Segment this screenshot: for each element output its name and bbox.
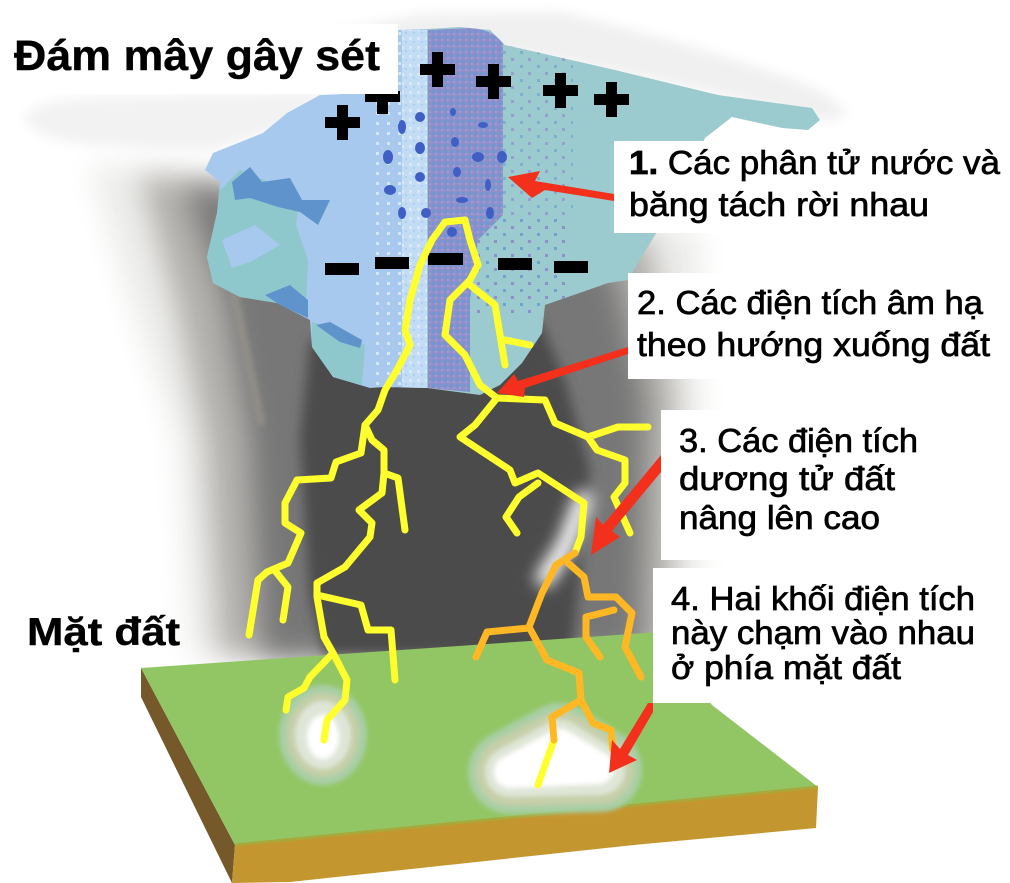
- cloud right half: teal: [427, 27, 820, 395]
- callout 3: 3. Các điện tích: [679, 422, 918, 459]
- callout 2: [628, 273, 1010, 379]
- purple stippled band: [428, 28, 503, 392]
- title box: [0, 24, 398, 94]
- callout 3: dương tử đất: [679, 460, 895, 497]
- callout 3: nâng lên cao: [679, 499, 880, 536]
- callout 1: băng tách rời nhau: [629, 186, 929, 223]
- panel: storm cloud body: [205, 27, 820, 395]
- title: Đám mây gây sét: [14, 32, 380, 80]
- callout 2: theo hướng xuống đất: [637, 326, 990, 363]
- ground left side: [141, 668, 235, 883]
- arrow 4: [609, 703, 653, 773]
- glow: left strike point: [279, 685, 367, 785]
- negative charges: [325, 253, 588, 275]
- panel: dark storm column: [90, 165, 700, 655]
- light stippled band: [402, 30, 427, 388]
- ground label: Mặt đất: [27, 611, 180, 654]
- water and ice particles: [383, 108, 507, 237]
- callout 4: này chạm vào nhau: [671, 614, 975, 651]
- sparse stipple beside the light band: [376, 32, 401, 388]
- arrow 3: [591, 455, 661, 555]
- callout 1: 1. Các phân tử nước và: [629, 144, 1001, 181]
- callout 2: 2. Các điện tích âm hạ: [637, 284, 984, 321]
- lightning: right branches: [445, 220, 648, 785]
- panel: pale upper cloud: [24, 12, 846, 150]
- lightning: left branches: [249, 220, 465, 740]
- panel: ground surface: [141, 632, 818, 883]
- callout 4: ở phía mặt đất: [671, 649, 901, 686]
- glow: right strike point: [510, 745, 600, 772]
- lightning: orange upward leader: [476, 553, 641, 750]
- ground front side: [232, 787, 818, 883]
- positive charges: [325, 52, 629, 140]
- ground top: [141, 632, 818, 845]
- callout 3: [661, 410, 1010, 560]
- arrow 1: [508, 171, 614, 201]
- arrow 2: [497, 347, 628, 397]
- sparse dots on the teal side: [477, 219, 565, 313]
- cloud left half: light blue: [205, 29, 427, 388]
- callout 4: [653, 568, 1010, 703]
- callout 1: [614, 141, 1010, 233]
- left teal patch and blotches: [205, 167, 365, 385]
- callout 4: 4. Hai khối điện tích: [671, 580, 975, 617]
